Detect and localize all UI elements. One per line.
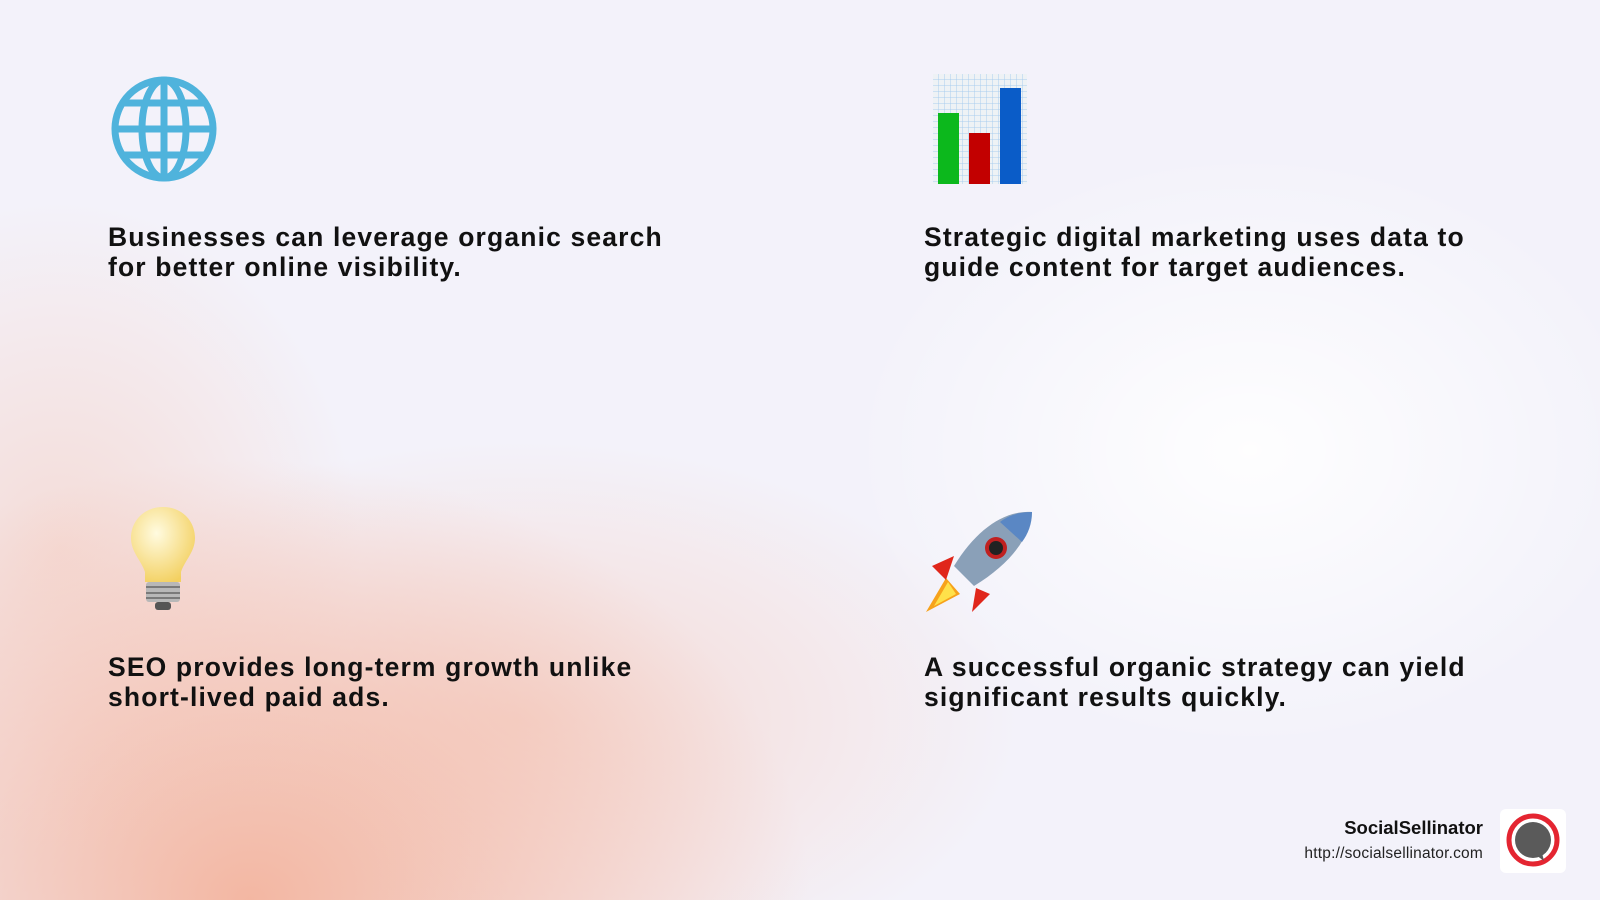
logo <box>1500 809 1566 873</box>
text: organic strategy results: A successful organic strategy can yield <box>924 652 1466 682</box>
icon: bar chart <box>933 74 1027 184</box>
text: SEO long-term: short-lived paid ads. <box>108 682 390 712</box>
text: organic strategy results: significant results quickly. <box>924 682 1287 712</box>
text: strategic marketing: Strategic digital marketing uses data to <box>924 222 1465 252</box>
text: organic search <box>108 222 663 282</box>
text: organic strategy results <box>924 652 1466 712</box>
text: organic search: for better online visibility. <box>108 252 462 282</box>
text: strategic marketing <box>924 222 1465 282</box>
text: organic search: Businesses can leverage organic search <box>108 222 663 252</box>
icon: light bulb <box>131 507 195 610</box>
text: SEO long-term: SEO provides long-term growth unlike <box>108 652 632 682</box>
brand url: http://socialsellinator.com <box>1304 845 1483 862</box>
brand block <box>1304 809 1566 873</box>
text: SEO long-term <box>108 652 632 712</box>
icon: globe <box>112 76 216 182</box>
brand name: SocialSellinator <box>1344 817 1483 838</box>
text: strategic marketing: guide content for target audiences. <box>924 252 1406 282</box>
icon: rocket <box>926 512 1032 612</box>
